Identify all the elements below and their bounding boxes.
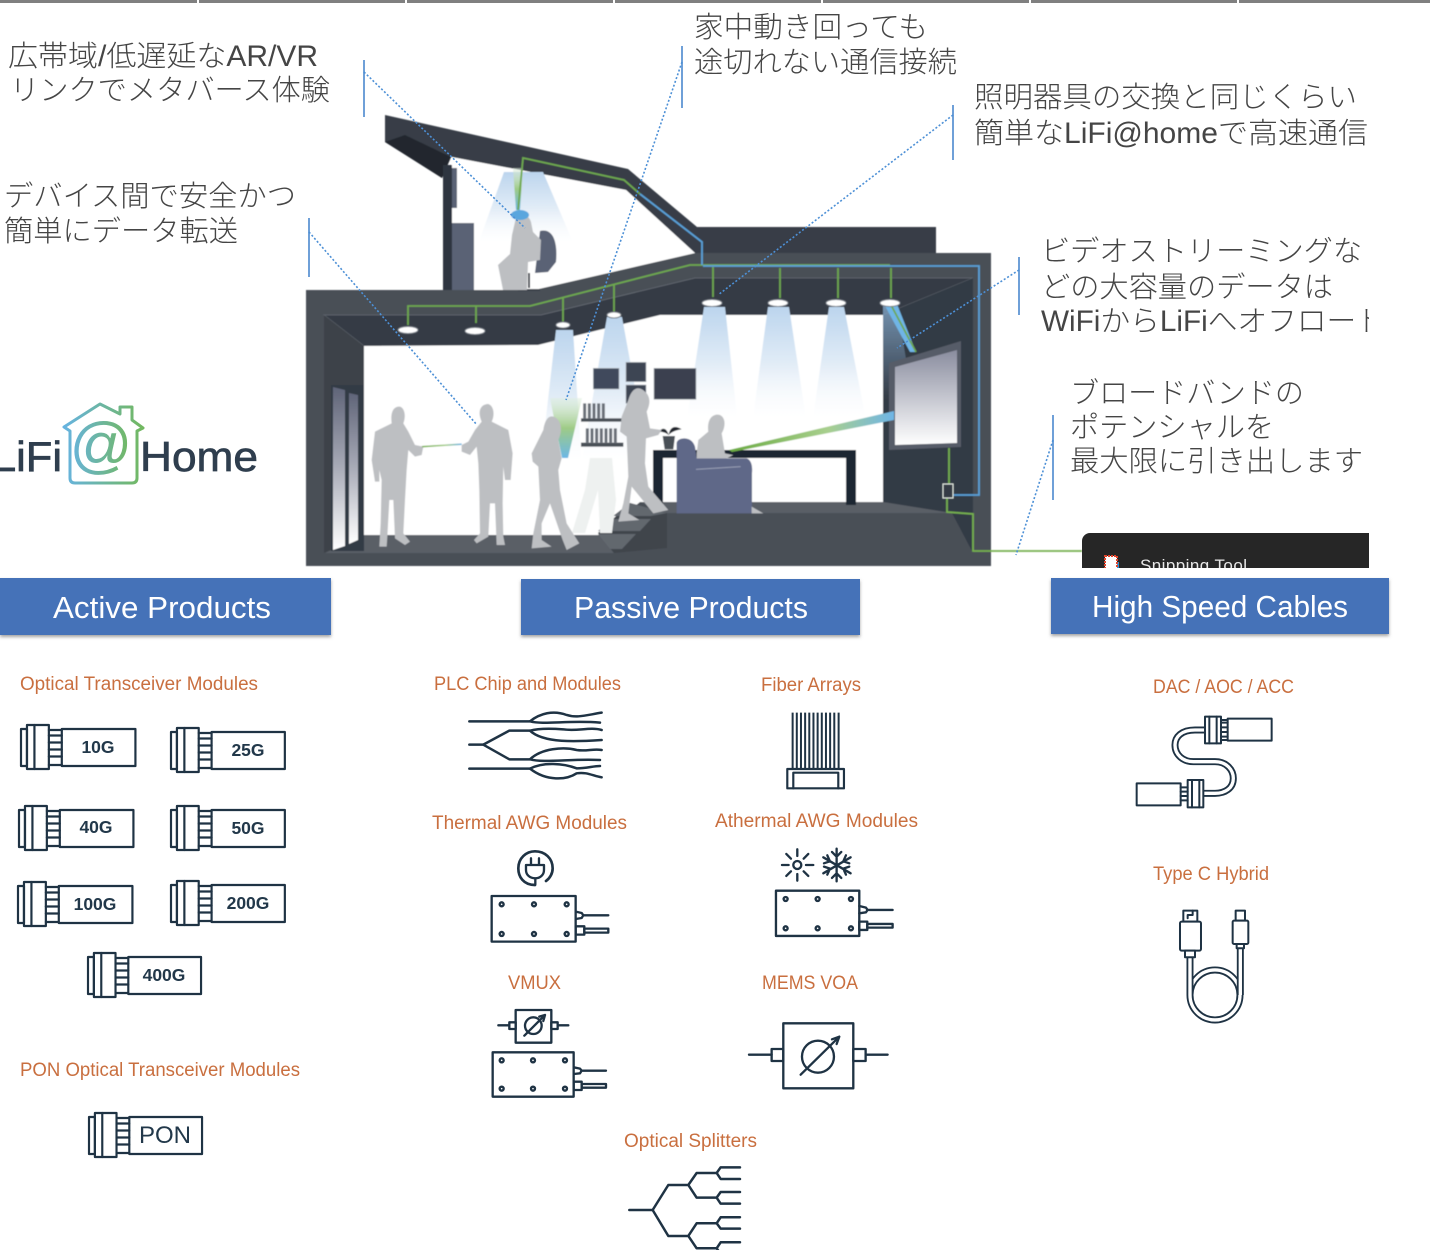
upper floor surface xyxy=(640,502,952,513)
callout: maximise broadband: ブロードバンドの xyxy=(1070,377,1304,410)
right wall xyxy=(883,278,973,553)
LiFi@Home logo: @ xyxy=(69,411,131,480)
callout: seamless connection at home: 家中動き回っても xyxy=(694,11,928,44)
icon: 200G transceiver xyxy=(171,881,285,925)
icon: 40G transceiver xyxy=(19,806,133,850)
heading: Passive Products: Passive Products xyxy=(574,590,808,625)
heading: Passive Products xyxy=(521,579,860,635)
label: PLC Chip and Modules: PLC Chip and Modules xyxy=(434,674,621,695)
callout: device data transfer xyxy=(4,180,477,425)
ceiling xyxy=(324,278,973,346)
callout: maximise broadband: 最大限に引き出します xyxy=(1070,445,1363,478)
upper room white interior xyxy=(452,157,695,290)
icon: 400G transceiver: 400G xyxy=(143,965,185,985)
data beam to screen xyxy=(729,411,894,452)
ceiling lights xyxy=(398,300,900,334)
icon: VMUX xyxy=(493,1010,606,1097)
icon: PLC chip xyxy=(469,713,602,778)
callout: maximise broadband: ポテンシャルを xyxy=(1070,411,1274,444)
label: Athermal AWG Modules: Athermal AWG Modules xyxy=(715,811,918,832)
icon: 10G transceiver: 10G xyxy=(81,737,115,757)
callout: device data transfer: デバイス間で安全かつ xyxy=(4,180,296,213)
icon: 200G transceiver: 200G xyxy=(227,893,269,913)
icon: MEMS VOA xyxy=(749,1023,888,1088)
icon: PON transceiver xyxy=(89,1113,202,1157)
wall pictures and shelves xyxy=(581,362,696,449)
person ghost trail xyxy=(572,458,616,533)
fibre and network cabling xyxy=(408,158,1082,551)
roof underside xyxy=(385,135,451,178)
icon: 50G transceiver xyxy=(171,806,285,850)
stairs xyxy=(598,503,667,553)
upper room column and cabinet xyxy=(443,165,474,290)
callout: device data transfer: 簡単にデータ転送 xyxy=(4,215,238,248)
callout: seamless connection at home xyxy=(566,11,957,400)
icon: 50G transceiver: 50G xyxy=(231,818,265,838)
LiFi@Home logo: Home xyxy=(140,433,258,480)
house outer shell xyxy=(306,253,991,566)
heading: Active Products xyxy=(0,578,331,635)
snipping tool overlay: Snipping Tool xyxy=(1140,556,1247,575)
icon: 100G transceiver: 100G xyxy=(74,894,116,914)
heading: High Speed Cables xyxy=(1051,578,1389,634)
icon: 40G transceiver: 40G xyxy=(79,817,113,837)
icon: 25G transceiver: 25G xyxy=(231,740,265,760)
label: MEMS VOA: MEMS VOA xyxy=(762,973,858,994)
label: Optical Transceiver Modules: Optical Transceiver Modules xyxy=(20,674,258,695)
callout: maximise broadband xyxy=(1016,377,1363,555)
icon: PON transceiver: PON xyxy=(139,1122,191,1149)
light cones xyxy=(477,168,916,470)
icon: Type C hybrid cable xyxy=(1180,911,1248,1020)
icon: thermal AWG module xyxy=(492,851,608,942)
callout: easy as changing a light: 簡単なLiFi@homeで高速通信 xyxy=(974,117,1368,150)
icon: athermal AWG module xyxy=(776,849,893,936)
callout: AR/VR metaverse xyxy=(8,40,525,228)
callout: AR/VR metaverse: リンクでメタバース体験 xyxy=(10,75,330,107)
label: Thermal AWG Modules: Thermal AWG Modules xyxy=(432,813,627,834)
icon: 10G transceiver xyxy=(21,725,135,769)
people group right with armchair xyxy=(618,388,763,522)
label: Fiber Arrays: Fiber Arrays xyxy=(761,675,861,696)
room interior xyxy=(364,315,883,535)
callout: easy as changing a light: 照明器具の交換と同じくらい xyxy=(974,82,1357,114)
icon: 25G transceiver xyxy=(171,728,285,772)
door xyxy=(331,385,364,551)
icon: DAC/AOC/ACC cable xyxy=(1137,717,1272,807)
upper roof xyxy=(385,115,936,253)
table xyxy=(653,450,856,505)
label: VMUX: VMUX xyxy=(508,973,561,994)
left wall xyxy=(324,315,364,553)
seated VR user with chair xyxy=(498,210,556,290)
heading: Active Products: Active Products xyxy=(53,590,271,625)
label: Type C Hybrid: Type C Hybrid xyxy=(1153,864,1269,885)
label: Optical Splitters: Optical Splitters xyxy=(624,1131,757,1152)
callout: easy as changing a light xyxy=(718,82,1368,295)
snipping tool overlay xyxy=(1082,533,1369,568)
icon: 100G transceiver xyxy=(18,882,132,926)
house cross-section illustration xyxy=(306,115,1082,566)
wall-mounted screen xyxy=(889,341,961,450)
lower floor xyxy=(325,535,614,553)
label: DAC / AOC / ACC: DAC / AOC / ACC xyxy=(1153,677,1294,698)
callout: WiFi offload to LiFi: ビデオストリーミングな xyxy=(1041,235,1362,268)
LiFi@Home logo xyxy=(0,404,258,483)
icon: 400G transceiver xyxy=(88,953,201,997)
heading: High Speed Cables: High Speed Cables xyxy=(1092,589,1348,624)
icon: fiber array xyxy=(787,713,844,788)
icon: optical splitter tree xyxy=(629,1167,740,1250)
callout: WiFi offload to LiFi: WiFiからLiFiへオフロード xyxy=(1041,306,1386,338)
callout: WiFi offload to LiFi: どの大容量のデータは xyxy=(1041,271,1333,304)
window top edge strip xyxy=(0,0,1430,3)
label: PON Optical Transceiver Modules: PON Optical Transceiver Modules xyxy=(20,1060,300,1081)
callout: seamless connection at home: 途切れない通信接続 xyxy=(694,46,957,79)
callout: WiFi offload to LiFi xyxy=(897,235,1386,348)
people group left xyxy=(372,404,579,550)
callout: AR/VR metaverse: 広帯域/低遅延なAR/VR xyxy=(8,40,318,73)
